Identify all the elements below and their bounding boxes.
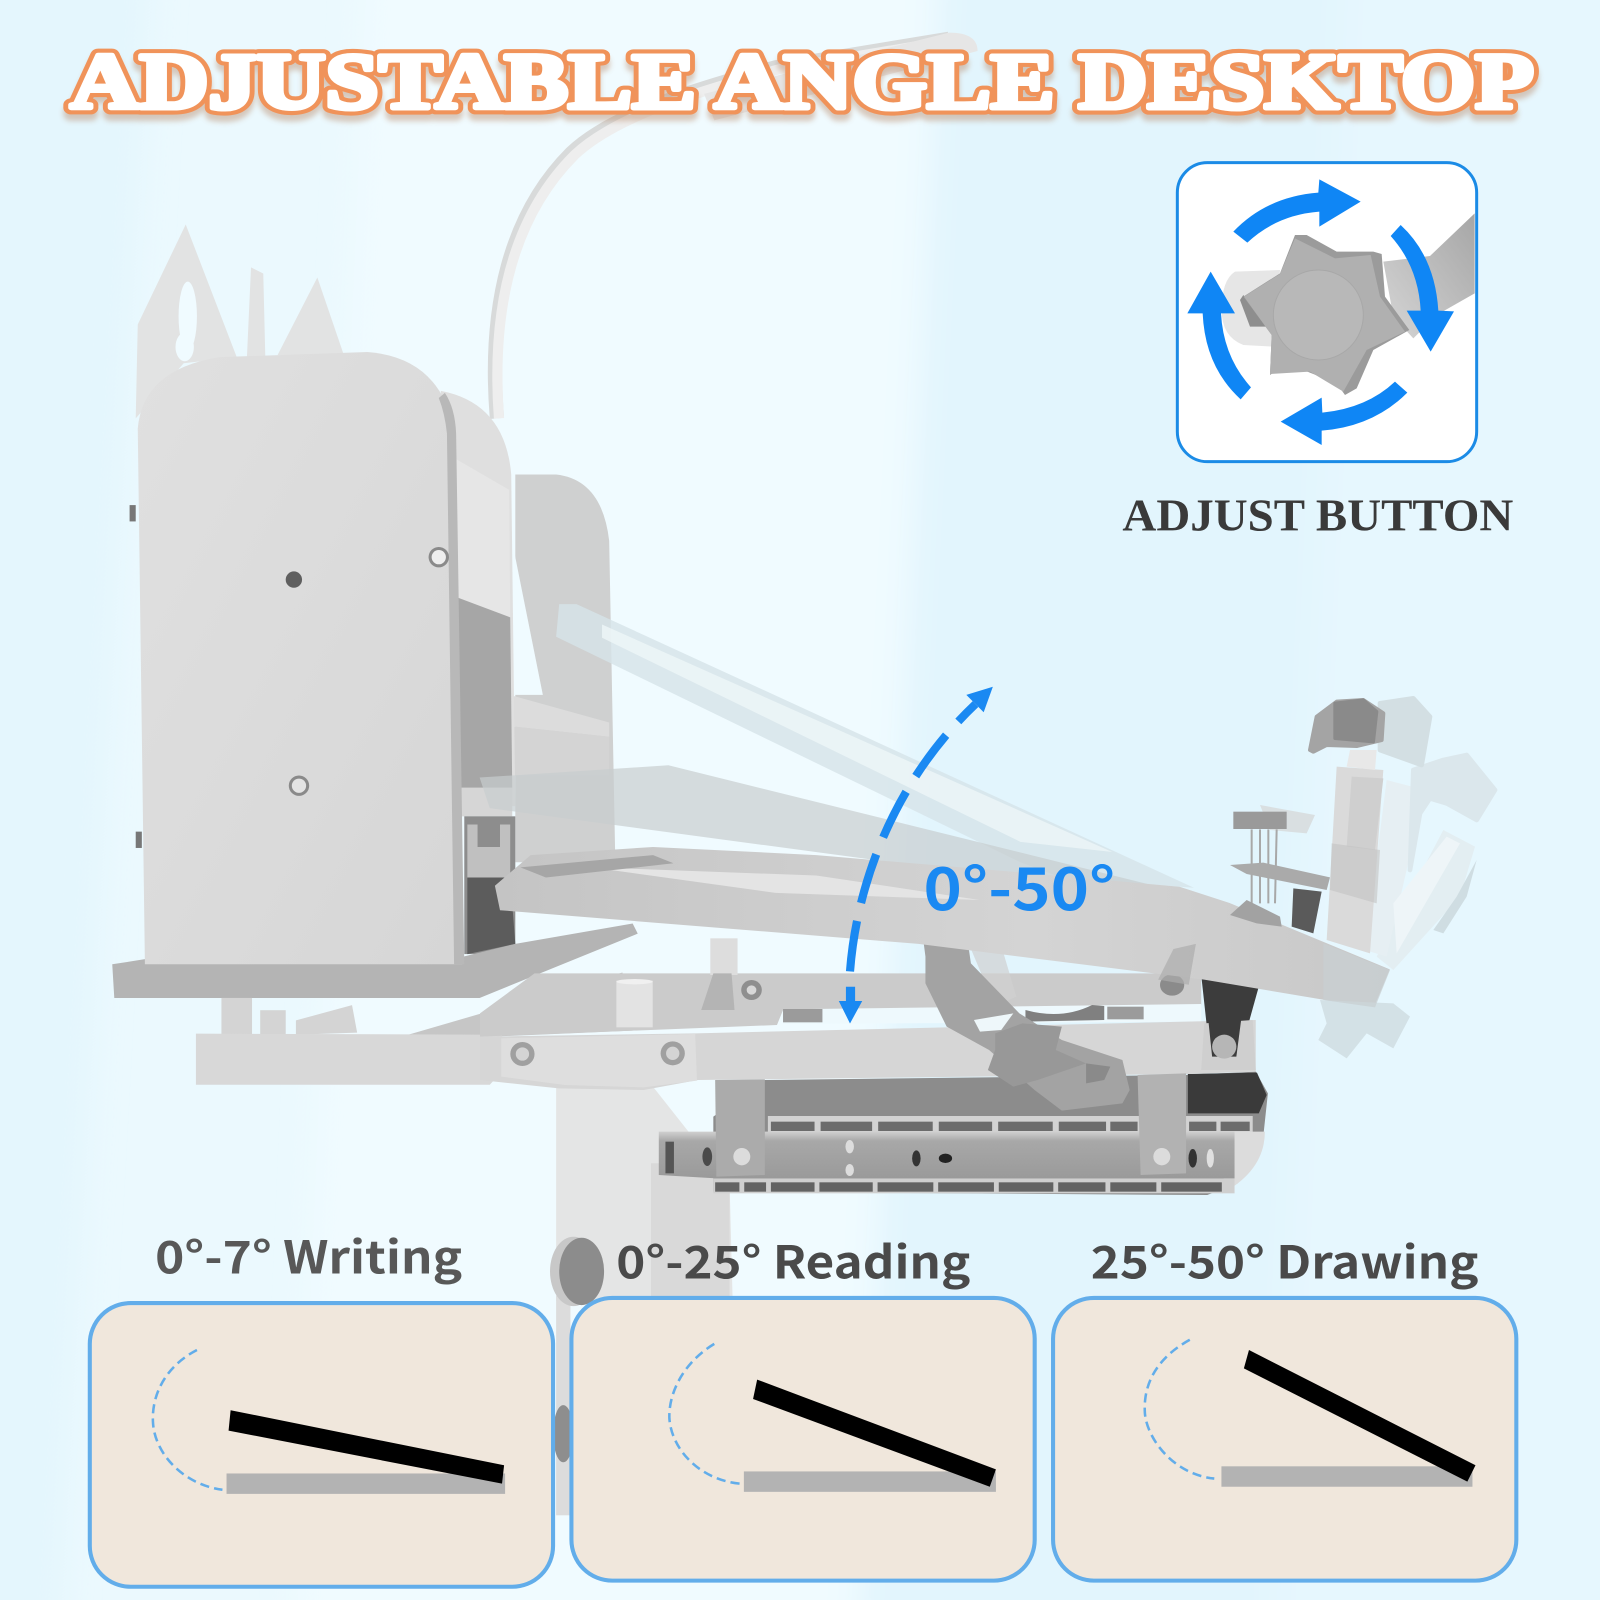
window under upper rail <box>783 1004 1201 1024</box>
lower slatted band <box>713 1178 1235 1193</box>
adjust button caption: ADJUST BUTTON <box>1122 490 1513 541</box>
base board <box>112 923 638 998</box>
solid clamp post and knob <box>1310 700 1383 953</box>
ghost desktop at 25 degrees <box>480 765 1204 898</box>
tilt mechanism link <box>919 910 1130 1111</box>
ghost lower clamp <box>1318 1000 1410 1058</box>
panel: adjust button, mapped from zoom coordinates <box>1177 163 1477 462</box>
title: ADJUSTABLE ANGLE DESKTOP <box>70 38 1534 126</box>
undercarriage, drawer and rails, mapped from zoom coordinates <box>480 910 1268 1195</box>
support post and height knob <box>550 1082 733 1515</box>
drawer body <box>713 1072 1268 1195</box>
ghost desktop at 50 degrees <box>556 604 1194 888</box>
title: ADJUSTABLE ANGLE DESKTOP <box>70 38 1534 126</box>
ghost clamp posts <box>1365 698 1495 970</box>
metal slide rail <box>659 1132 1235 1178</box>
hinge bracket <box>1160 974 1259 1070</box>
main horizontal beam <box>480 1020 1256 1090</box>
book holder spikes behind organiser <box>136 224 344 418</box>
tilt range label: 0°-50° <box>923 842 1115 928</box>
front organiser panel with screws <box>130 352 464 964</box>
tilt range arrow <box>839 687 993 1023</box>
star knob <box>1243 235 1409 395</box>
knob arm <box>1222 213 1475 347</box>
small clamp screw <box>1230 805 1330 933</box>
rear organiser panel <box>513 474 615 862</box>
title: ADJUSTABLE ANGLE DESKTOP <box>70 44 1534 132</box>
pins <box>616 938 762 1027</box>
label: reading: 0°-25° Reading <box>616 1227 971 1292</box>
frame legs under base board <box>221 998 357 1037</box>
rotation arrows <box>1187 179 1454 445</box>
label: drawing: 25°-50° Drawing <box>1091 1227 1479 1292</box>
left extension of main beam <box>196 972 633 1085</box>
ghost tray end <box>1323 943 1390 1007</box>
drawer hanger brackets <box>715 1073 1186 1177</box>
lamp cord and lamp head <box>495 33 978 418</box>
panel: drawing angle <box>1053 1298 1516 1581</box>
main flat desktop tray <box>495 847 1390 1008</box>
rail brackets <box>783 1005 1144 1022</box>
label: writing: 0°-7° Writing <box>155 1221 462 1286</box>
clamps on desktop edge, mapped from zoom coordinates <box>1230 698 1495 1058</box>
upper slatted band <box>768 1116 1253 1132</box>
mounting plate with screws <box>501 1034 697 1087</box>
panel frame <box>1177 163 1477 462</box>
panel: writing angle <box>90 1303 553 1587</box>
middle organiser panel <box>441 391 515 816</box>
upper rail <box>480 973 1201 1037</box>
side organiser bracket <box>464 816 515 954</box>
rounded drawer end <box>1222 1132 1265 1193</box>
panel: reading angle <box>571 1298 1035 1581</box>
